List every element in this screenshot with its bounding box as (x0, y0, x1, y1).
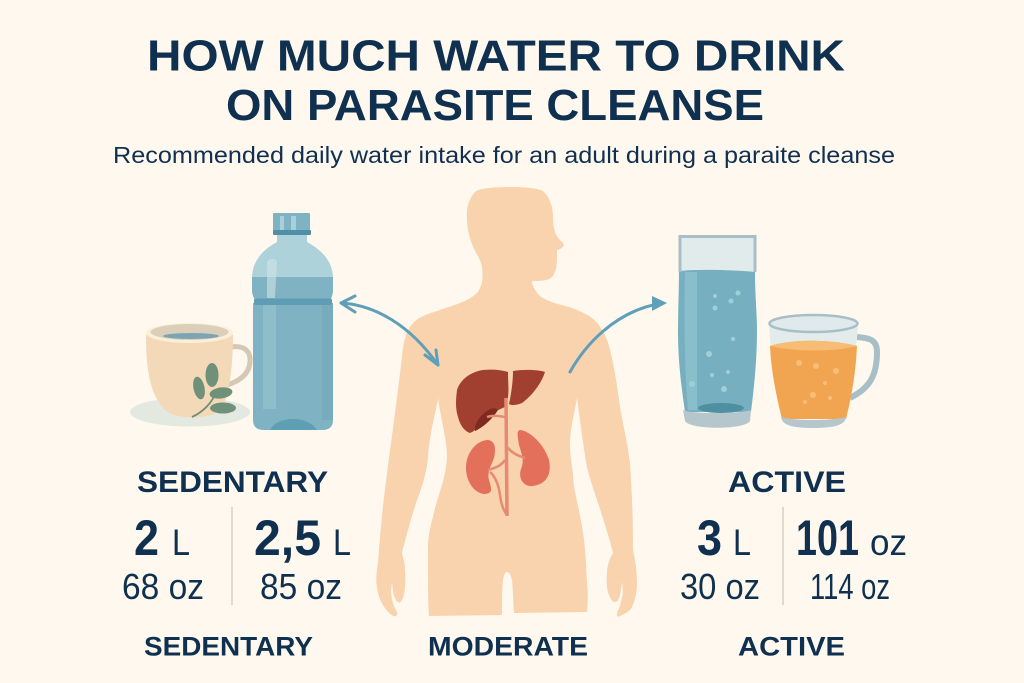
value: 101 oz: oz (870, 522, 907, 563)
value: 114 oz: 114 oz (810, 566, 890, 607)
icon: tea cup with leaves (130, 323, 250, 426)
body silhouette (376, 187, 637, 617)
vessels (487, 398, 525, 516)
label: sedentary: SEDENTARY (144, 632, 313, 662)
value: 3 L (697, 510, 751, 566)
kidneys (518, 430, 550, 486)
value: 68 oz: 68 oz (122, 566, 204, 607)
icon: mug of orange drink (769, 315, 877, 428)
arrow: body to glass (570, 296, 667, 372)
value: 3 L: 3 (697, 510, 722, 566)
title: HOW MUCH WATER TO DRINK (147, 32, 845, 80)
value: 101 oz: 101 (796, 510, 859, 566)
heading: sedentary: SEDENTARY (137, 466, 328, 499)
value: 85 oz: 85 oz (260, 566, 342, 607)
subtitle: Recommended daily water intake for an adult during a paraite cleanse (113, 142, 895, 168)
value: 2,5 L: 2,5 (254, 510, 321, 566)
title (147, 32, 845, 130)
value: 2 L (134, 510, 190, 566)
liver (456, 370, 545, 433)
value: 30 oz: 30 oz (680, 566, 760, 607)
arrow: bottle to body (341, 296, 438, 365)
value: 2 L: 2 (134, 510, 159, 566)
title: ON PARASITE CLEANSE (226, 81, 764, 130)
icon: water bottle (252, 213, 333, 430)
label: active: ACTIVE (738, 632, 845, 662)
value: 2 L: L (172, 522, 190, 563)
heading: active: ACTIVE (728, 466, 846, 499)
liver and kidneys (456, 370, 550, 516)
value: 3 L: L (733, 522, 751, 563)
label: moderate: MODERATE (428, 632, 588, 662)
icon: tall water glass (678, 236, 757, 428)
value: 2,5 L: L (333, 522, 351, 563)
